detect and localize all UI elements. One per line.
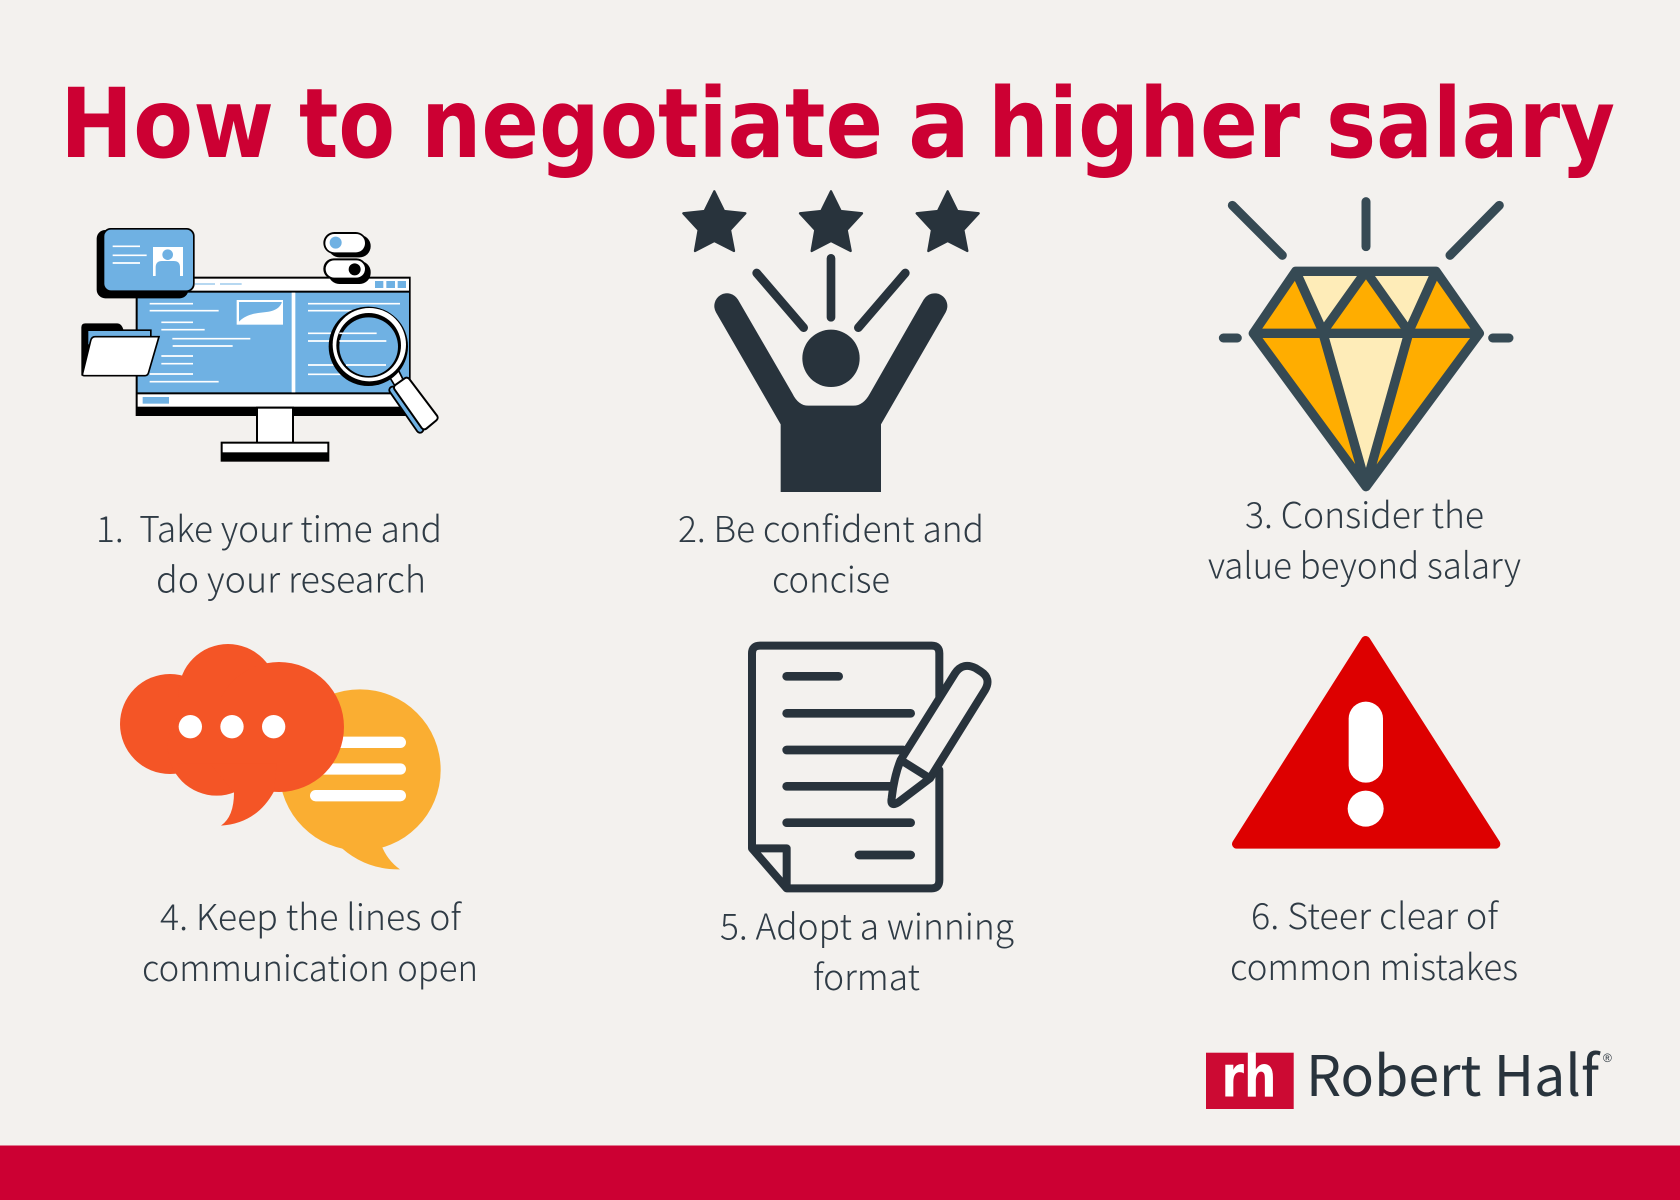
caption: step 5: format [813, 949, 920, 1001]
caption: step 5: 5. Adopt a winning [720, 898, 1014, 950]
caption: step 3: 3. Consider the [1245, 487, 1484, 539]
caption: step 2: concise [772, 552, 890, 604]
caption: step 2 [678, 501, 984, 604]
caption: step 3 [1208, 487, 1521, 590]
caption: step 6: 6. Steer clear of [1251, 888, 1499, 940]
caption: step 5 [720, 898, 1014, 1001]
panel: step 2 confidence [678, 191, 984, 604]
title: a [908, 68, 970, 180]
caption: step 4: communication open [142, 940, 478, 992]
panel: step 6 mistakes [1230, 641, 1518, 991]
caption: step 4 [142, 889, 478, 992]
title: negotiate [421, 68, 883, 180]
icon: computer monitor with magnifier [81, 228, 434, 462]
caption: step 1: do your research [156, 552, 426, 604]
logo: Robert Half: ® [1603, 1051, 1612, 1065]
caption: step 6 [1230, 888, 1518, 991]
title: to [299, 68, 395, 180]
icon: diamond [1223, 202, 1509, 487]
panel: step 3 value [1208, 202, 1521, 589]
icon: speech bubbles [120, 644, 441, 869]
footer bar [0, 1146, 1680, 1200]
icon: person with raised arms and stars [683, 191, 979, 492]
logo: Robert Half: Robert Half [1306, 1032, 1601, 1113]
panel: step 4 communication [120, 644, 478, 992]
title: How [60, 68, 274, 180]
title: salary [1326, 68, 1615, 180]
caption: step 3: value beyond salary [1208, 538, 1521, 590]
panel: step 1 research [81, 228, 442, 604]
panel: step 5 format [720, 646, 1014, 1001]
icon: warning triangle [1237, 641, 1496, 844]
icon: document and pencil [752, 646, 988, 888]
caption: step 6: common mistakes [1230, 939, 1518, 991]
logo: Robert Half: rh [1222, 1043, 1276, 1111]
caption: step 4: 4. Keep the lines of [160, 889, 462, 941]
caption: step 1 [96, 501, 442, 604]
title: higher [988, 68, 1301, 180]
caption: step 1: 1. Take your time and [96, 501, 442, 553]
caption: step 2: 2. Be confident and [678, 501, 984, 553]
